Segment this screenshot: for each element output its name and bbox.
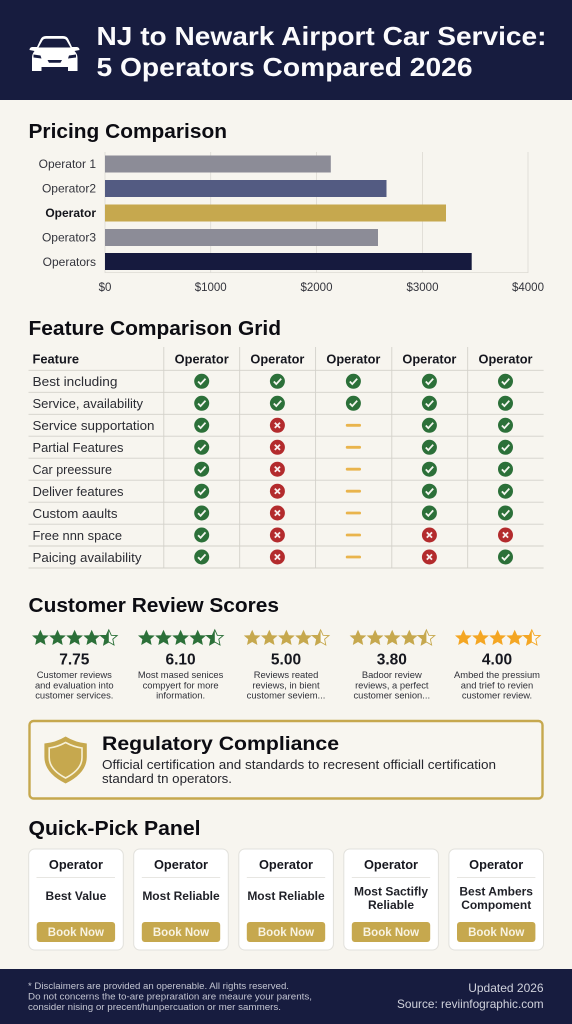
review score: operator 5: Ambed the pressium [454, 669, 540, 680]
review score: operator 2 [138, 630, 224, 700]
review score: operator 1: customer services. [35, 690, 113, 700]
bar: operators [105, 253, 472, 270]
row: best including: Best including [32, 374, 117, 389]
card: quick pick 5: Compoment [461, 898, 531, 912]
header banner [0, 0, 572, 100]
bar labels: Operator [45, 206, 96, 220]
row: best including [32, 374, 513, 389]
table header: Feature [32, 352, 79, 366]
heading: pricing comparison: Pricing Comparison [28, 120, 227, 143]
review score: operator 4 [350, 630, 435, 700]
row: custom aaults: Custom aaults [32, 506, 118, 521]
card: quick pick 5: Best Ambers [459, 884, 533, 898]
row: custom aaults [32, 506, 513, 521]
review score: operator 2: 6.10 [166, 652, 196, 668]
bar chart: pricing [39, 152, 544, 294]
review score: operator 1 [32, 630, 117, 700]
card: quick pick 4: Book Now [363, 927, 419, 939]
axis labels: $1000 [195, 282, 227, 294]
bar labels [39, 157, 96, 269]
card: quick pick 3: Book Now [258, 927, 314, 939]
row: service supportation [32, 418, 513, 433]
review score: operator 4: reviews, a perfect [355, 679, 429, 690]
card: quick pick 4: Reliable [368, 898, 414, 912]
title [96, 21, 546, 82]
card: quick pick 5: Book Now [468, 927, 524, 939]
card: quick pick 1: Operator [49, 857, 103, 872]
table header: Operator [175, 352, 229, 366]
bar: operator highlighted [105, 204, 446, 222]
review score: operator 5 [454, 630, 540, 700]
card: quick pick 2: Most Reliable [142, 889, 220, 903]
panel: regulatory compliance [30, 721, 542, 798]
card: quick pick 2 [134, 849, 228, 950]
axis labels [99, 282, 544, 294]
review score: operator 5: customer review. [462, 690, 532, 700]
table header [32, 352, 533, 366]
heading: customer review scores: Customer Review Scores [28, 594, 279, 617]
bar labels: Operators [43, 255, 96, 269]
table header: Operator [250, 352, 304, 366]
review score: operator 4: 3.80 [377, 652, 407, 668]
review score: operator 3 [244, 630, 329, 700]
card: quick pick 2: Book Now [153, 927, 209, 939]
review score: operator 3: 5.00 [271, 652, 301, 668]
bar: operator 3 [105, 229, 378, 246]
card: quick pick 3: Operator [259, 857, 313, 872]
heading: quick-pick panel: Quick-Pick Panel [28, 817, 200, 840]
axis labels: $0 [99, 282, 111, 294]
bar labels: Operator 1 [39, 157, 96, 171]
card: quick pick 1 [29, 849, 123, 950]
compliance text [102, 758, 496, 786]
row: paicing availability: Paicing availability [32, 550, 142, 565]
update and source: Updated 2026 [468, 981, 544, 995]
icon: shield [44, 736, 87, 784]
row: paicing availability [32, 550, 513, 565]
card: quick pick 5 [449, 849, 544, 950]
axis labels: $4000 [512, 282, 544, 294]
row: service availability: Service, availability [32, 396, 143, 411]
card: quick pick 4: Most Sactifly [354, 884, 428, 898]
card: quick pick 3 [239, 849, 333, 950]
update and source [397, 981, 544, 1011]
row: car preessure: Car preessure [32, 462, 112, 477]
compliance title: Regulatory Compliance [102, 733, 339, 755]
review score: operator 5: and trief to revien [461, 679, 533, 690]
row: deliver features: Deliver features [32, 484, 124, 499]
bar: operator 2 [105, 180, 386, 197]
heading: feature comparison grid: Feature Comparison Grid [28, 317, 281, 340]
review score: operator 1: and evaluation into [35, 679, 114, 690]
review score: operator 5: 4.00 [482, 652, 512, 668]
title: 5 Operators Compared 2026 [96, 52, 472, 82]
card: quick pick 4 [344, 849, 438, 950]
bar labels: Operator2 [42, 182, 96, 196]
row: partial features: Partial Features [32, 440, 124, 455]
row: service supportation: Service supportation [32, 418, 154, 433]
axis labels: $2000 [301, 282, 332, 294]
disclaimer text: consider nising or precent/hunpercuation or mer sammers. [28, 1002, 281, 1012]
bar: operator 1 [105, 156, 331, 172]
card: quick pick 5: Operator [469, 857, 523, 872]
card: quick pick 1: Best Value [46, 889, 107, 903]
footer [0, 969, 572, 1024]
review score: operator 2: compyert for more [143, 679, 219, 690]
table header: Operator [478, 352, 533, 366]
disclaimer text: Do not concerns the to-are prepraration are meaure your parents, [28, 992, 312, 1002]
review score: operator 4: Badoor review [362, 669, 422, 680]
row: partial features [32, 440, 513, 455]
card: quick pick 1: Book Now [48, 927, 104, 939]
disclaimer text [28, 981, 312, 1012]
card: quick pick 3: Most Reliable [247, 889, 325, 903]
review score: operator 1: Customer reviews [37, 669, 112, 680]
row: free nnn space: Free nnn space [32, 528, 122, 543]
review score: operator 2: information. [156, 690, 205, 700]
update and source: Source: reviinfographic.com [397, 997, 544, 1011]
table: feature comparison [28, 347, 544, 568]
disclaimer text: * Disclaimers are provided an operenable. All rights reserved. [28, 981, 289, 991]
card: quick pick 2: Operator [154, 857, 208, 872]
review score: operator 1: 7.75 [59, 652, 90, 668]
review score: operator 3: reviews, in bient [252, 679, 320, 690]
review score: operator 3: Reviews reated [254, 669, 318, 680]
table header: Operator [326, 352, 380, 366]
review score: operator 3: customer seviem... [247, 690, 325, 700]
compliance text: standard tn operators. [102, 772, 232, 786]
review score: operator 2: Most mased senices [138, 669, 224, 680]
icon: car [30, 36, 80, 71]
row: service availability [32, 396, 513, 411]
card: quick pick 4: Operator [364, 857, 418, 872]
compliance text: Official certification and standards to recresent officiall certification [102, 758, 496, 772]
table header: Operator [402, 352, 456, 366]
axis labels: $3000 [407, 282, 438, 294]
row: car preessure [32, 462, 513, 477]
title: NJ to Newark Airport Car Service: [96, 21, 546, 51]
bar labels: Operator3 [42, 230, 96, 244]
row: deliver features [32, 484, 513, 499]
row: free nnn space [32, 528, 513, 543]
review score: operator 4: customer senion... [353, 690, 430, 700]
